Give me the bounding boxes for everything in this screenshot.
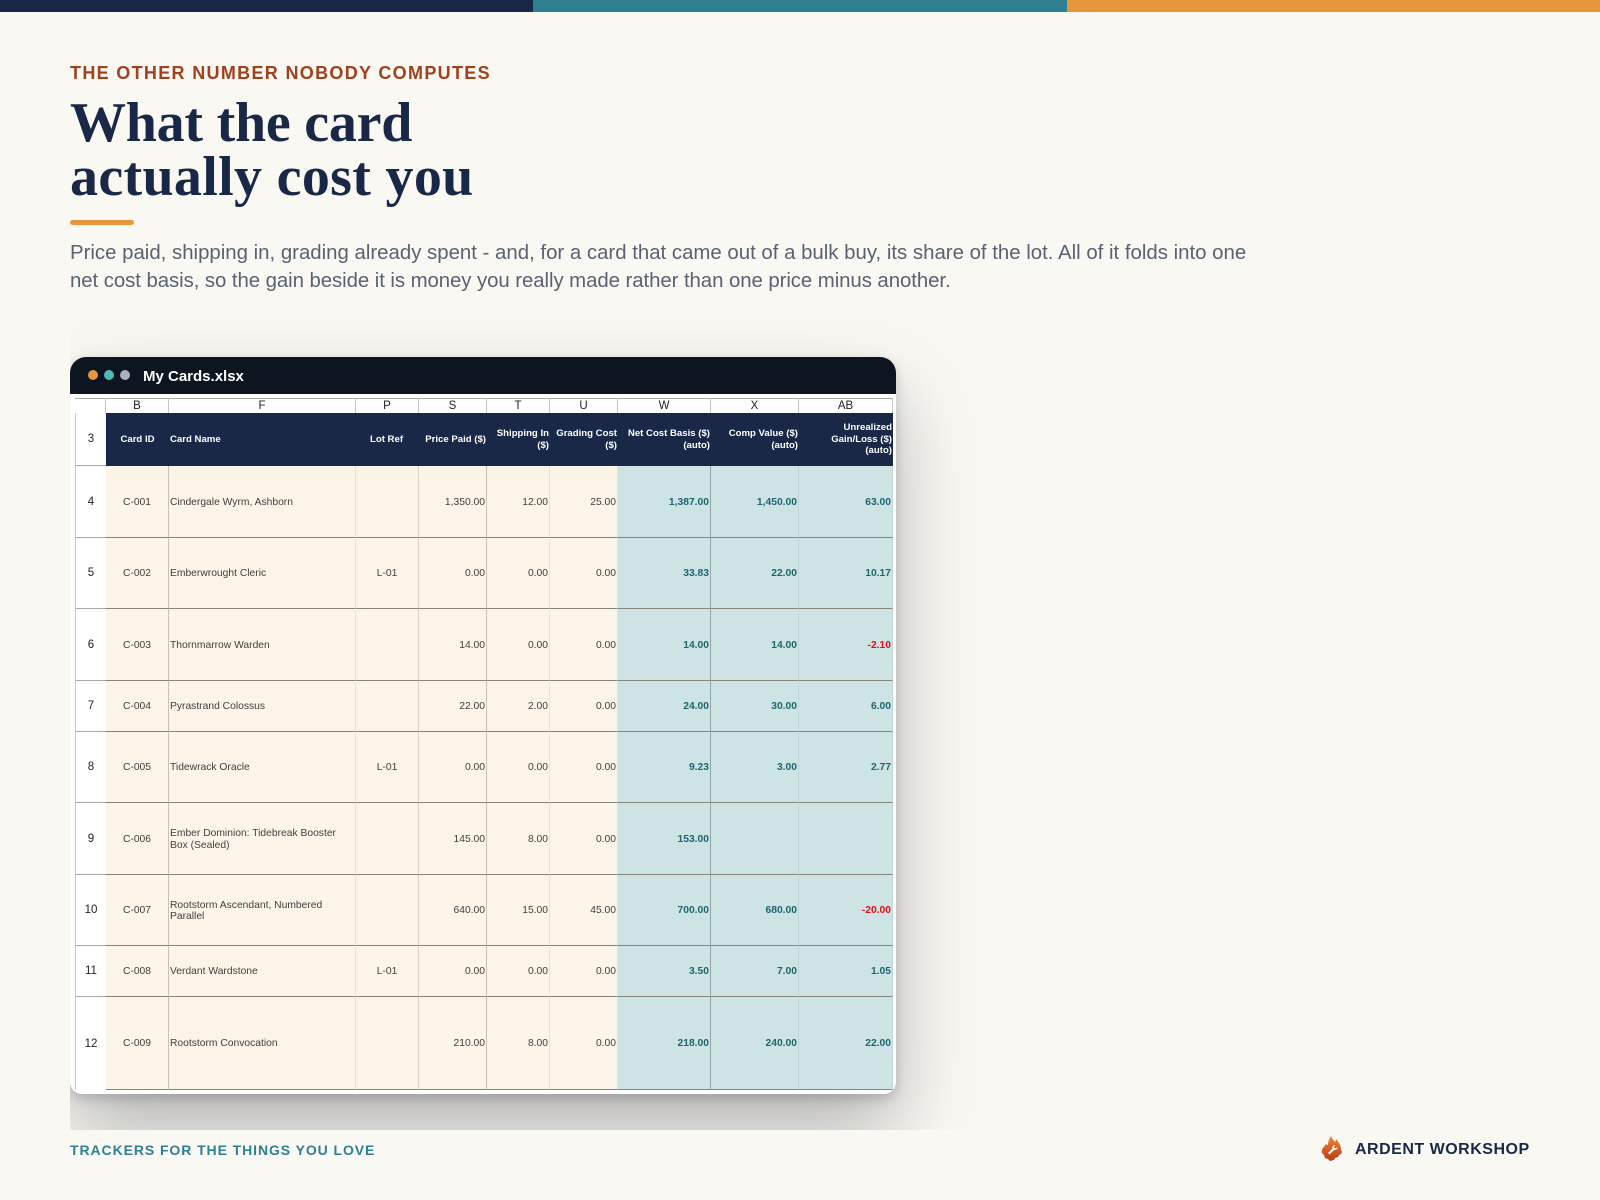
column letters: T <box>514 400 522 412</box>
header row: (auto) <box>771 440 798 450</box>
row: C-004: 7 <box>88 700 94 712</box>
footer tagline: TRACKERS FOR THE THINGS YOU LOVE <box>70 1142 375 1158</box>
file name: My Cards.xlsx <box>143 368 244 385</box>
row: C-002 <box>75 538 893 609</box>
row: C-005 <box>75 732 893 803</box>
row: C-003: 0.00 <box>528 640 548 651</box>
row: C-004: 30.00 <box>771 701 797 712</box>
icon: flame and wrench logo <box>1322 1136 1342 1161</box>
header row: Shipping In <box>497 428 549 439</box>
row: C-009: 0.00 <box>596 1038 616 1049</box>
row: C-007: 15.00 <box>522 905 548 916</box>
row: C-004: 6.00 <box>871 701 891 712</box>
row: C-003: 14.00 <box>683 640 709 651</box>
header row: Net Cost Basis ($) <box>628 428 710 439</box>
header row: 3 <box>88 433 94 445</box>
column letters: U <box>579 400 588 412</box>
row: C-008: C-008 <box>123 966 151 977</box>
row: C-008: 7.00 <box>777 966 797 977</box>
row: C-009 <box>75 997 893 1090</box>
row: C-007: Parallel <box>170 911 204 922</box>
row: C-003: 14.00 <box>771 640 797 651</box>
row: C-008: 3.50 <box>689 966 709 977</box>
row: C-005: 2.77 <box>871 762 891 773</box>
row: C-004: Pyrastrand Colossus <box>170 701 265 712</box>
row: C-003: -2.10 <box>868 640 891 651</box>
row: C-005: 9.23 <box>689 762 709 773</box>
row: C-008: 1.05 <box>871 966 891 977</box>
row: C-005: 0.00 <box>528 762 548 773</box>
column letters: P <box>383 400 391 412</box>
row: C-007: 700.00 <box>678 905 709 916</box>
row: C-001: 1,387.00 <box>669 497 709 508</box>
row: C-004: 0.00 <box>596 701 616 712</box>
header row: Card ID <box>120 434 155 445</box>
row: C-003 <box>75 609 893 681</box>
row: C-008 <box>75 946 893 997</box>
row: C-008: L-01 <box>377 966 397 977</box>
row: C-007: -20.00 <box>862 905 891 916</box>
row: C-008: 11 <box>85 965 97 977</box>
title <box>70 92 474 208</box>
row: C-001: C-001 <box>123 497 151 508</box>
header row: Unrealized <box>843 422 892 433</box>
row: C-006: 0.00 <box>596 834 616 845</box>
panel: spreadsheet window <box>70 357 896 1094</box>
row: C-003: 0.00 <box>596 640 616 651</box>
row: C-002: L-01 <box>377 568 397 579</box>
row: C-002: 10.17 <box>865 568 891 579</box>
row: C-004: C-004 <box>123 701 151 712</box>
row: C-009: C-009 <box>123 1038 151 1049</box>
row: C-003: 6 <box>88 639 94 651</box>
row: C-004: 24.00 <box>683 701 709 712</box>
row: C-001: 25.00 <box>590 497 616 508</box>
accent rule <box>70 220 134 225</box>
row: C-001: 63.00 <box>865 497 891 508</box>
column letters: W <box>659 400 669 412</box>
row: C-004: 22.00 <box>459 701 485 712</box>
column letters: F <box>258 400 266 412</box>
row: C-009: 22.00 <box>865 1038 891 1049</box>
column letters <box>75 398 893 1090</box>
row: C-007: 680.00 <box>766 905 797 916</box>
intro text: Price paid, shipping in, grading already spent - and, for a card that came out of a bulk buy, its share of the lot. All of it folds into one <box>70 242 1246 264</box>
row: C-002: 0.00 <box>596 568 616 579</box>
row: C-005: C-005 <box>123 762 151 773</box>
row: C-002: 33.83 <box>683 568 709 579</box>
row: C-008: 0.00 <box>528 966 548 977</box>
row: C-001: Cindergale Wyrm, Ashborn <box>170 497 293 508</box>
row: C-009: 240.00 <box>766 1038 797 1049</box>
column letters: B <box>133 400 141 412</box>
row: C-007: Rootstorm Ascendant, Numbered <box>170 900 322 910</box>
row: C-008: 0.00 <box>465 966 485 977</box>
row: C-005: 3.00 <box>777 762 797 773</box>
row: C-007: C-007 <box>123 905 151 916</box>
row: C-006: 145.00 <box>454 834 485 845</box>
title: actually cost you <box>70 146 474 208</box>
row: C-005: Tidewrack Oracle <box>170 762 250 773</box>
row: C-006 <box>75 803 893 875</box>
row: C-006: 8.00 <box>528 834 548 845</box>
row: C-007: 640.00 <box>454 905 485 916</box>
icon: teal window dot <box>104 370 114 380</box>
icon: grey window dot <box>120 370 130 380</box>
column letters: S <box>449 400 456 412</box>
row: C-004: 2.00 <box>528 701 548 712</box>
row: C-002: 0.00 <box>465 568 485 579</box>
top colour bar <box>0 0 1600 12</box>
title: What the card <box>70 92 412 154</box>
spreadsheet table <box>75 398 893 1090</box>
row: C-005: L-01 <box>377 762 397 773</box>
row: C-002: Emberwrought Cleric <box>170 568 266 579</box>
row: C-002: 0.00 <box>528 568 548 579</box>
header row: ($) <box>605 440 617 450</box>
row: C-006: 153.00 <box>678 834 709 845</box>
header row: Card Name <box>170 434 221 445</box>
row: C-006: 9 <box>88 833 94 845</box>
row: C-007: 10 <box>85 904 97 916</box>
header row <box>75 413 893 466</box>
header row: Grading Cost <box>556 428 617 439</box>
intro text: net cost basis, so the gain beside it is money you really made rather than one price minus another. <box>70 270 951 292</box>
icon: orange window dot <box>88 370 98 380</box>
row: C-001: 12.00 <box>522 497 548 508</box>
header row: Lot Ref <box>370 434 403 445</box>
row: C-003: 14.00 <box>459 640 485 651</box>
header row: Price Paid ($) <box>425 434 486 445</box>
eyebrow: THE OTHER NUMBER NOBODY COMPUTES <box>70 63 491 83</box>
row: C-002: C-002 <box>123 568 151 579</box>
row: C-007 <box>75 875 893 946</box>
row: C-005: 0.00 <box>465 762 485 773</box>
row: C-005: 8 <box>88 761 94 773</box>
row: C-001: 1,450.00 <box>757 497 797 508</box>
row: C-001: 4 <box>88 496 94 508</box>
header row: (auto) <box>683 440 710 450</box>
row: C-005: 0.00 <box>596 762 616 773</box>
column letters: X <box>751 400 758 412</box>
row: C-006: C-006 <box>123 834 151 845</box>
row: C-001: 1,350.00 <box>445 497 485 508</box>
row: C-003: Thornmarrow Warden <box>170 640 270 651</box>
row: C-009: 8.00 <box>528 1038 548 1049</box>
row: C-002: 5 <box>88 567 94 579</box>
row: C-008: Verdant Wardstone <box>170 966 258 977</box>
column letters: AB <box>838 400 853 412</box>
row: C-006: Ember Dominion: Tidebreak Booster <box>170 828 336 839</box>
header row: Gain/Loss ($) <box>831 434 892 445</box>
row: C-001 <box>75 466 893 538</box>
row: C-002: 22.00 <box>771 568 797 579</box>
row: C-004 <box>75 681 893 732</box>
row: C-006: Box (Sealed) <box>170 840 230 850</box>
window title bar <box>70 357 896 394</box>
row: C-008: 0.00 <box>596 966 616 977</box>
row: C-003: C-003 <box>123 640 151 651</box>
header row: ($) <box>537 440 549 450</box>
row: C-009: 218.00 <box>678 1038 709 1049</box>
header row: Comp Value ($) <box>729 428 798 439</box>
row: C-009: 210.00 <box>454 1038 485 1049</box>
header row: (auto) <box>865 445 892 456</box>
row: C-009: Rootstorm Convocation <box>170 1038 278 1049</box>
intro text <box>70 242 1246 292</box>
brand name: ARDENT WORKSHOP <box>1355 1141 1530 1158</box>
row: C-009: 12 <box>85 1038 97 1050</box>
row: C-007: 45.00 <box>590 905 616 916</box>
